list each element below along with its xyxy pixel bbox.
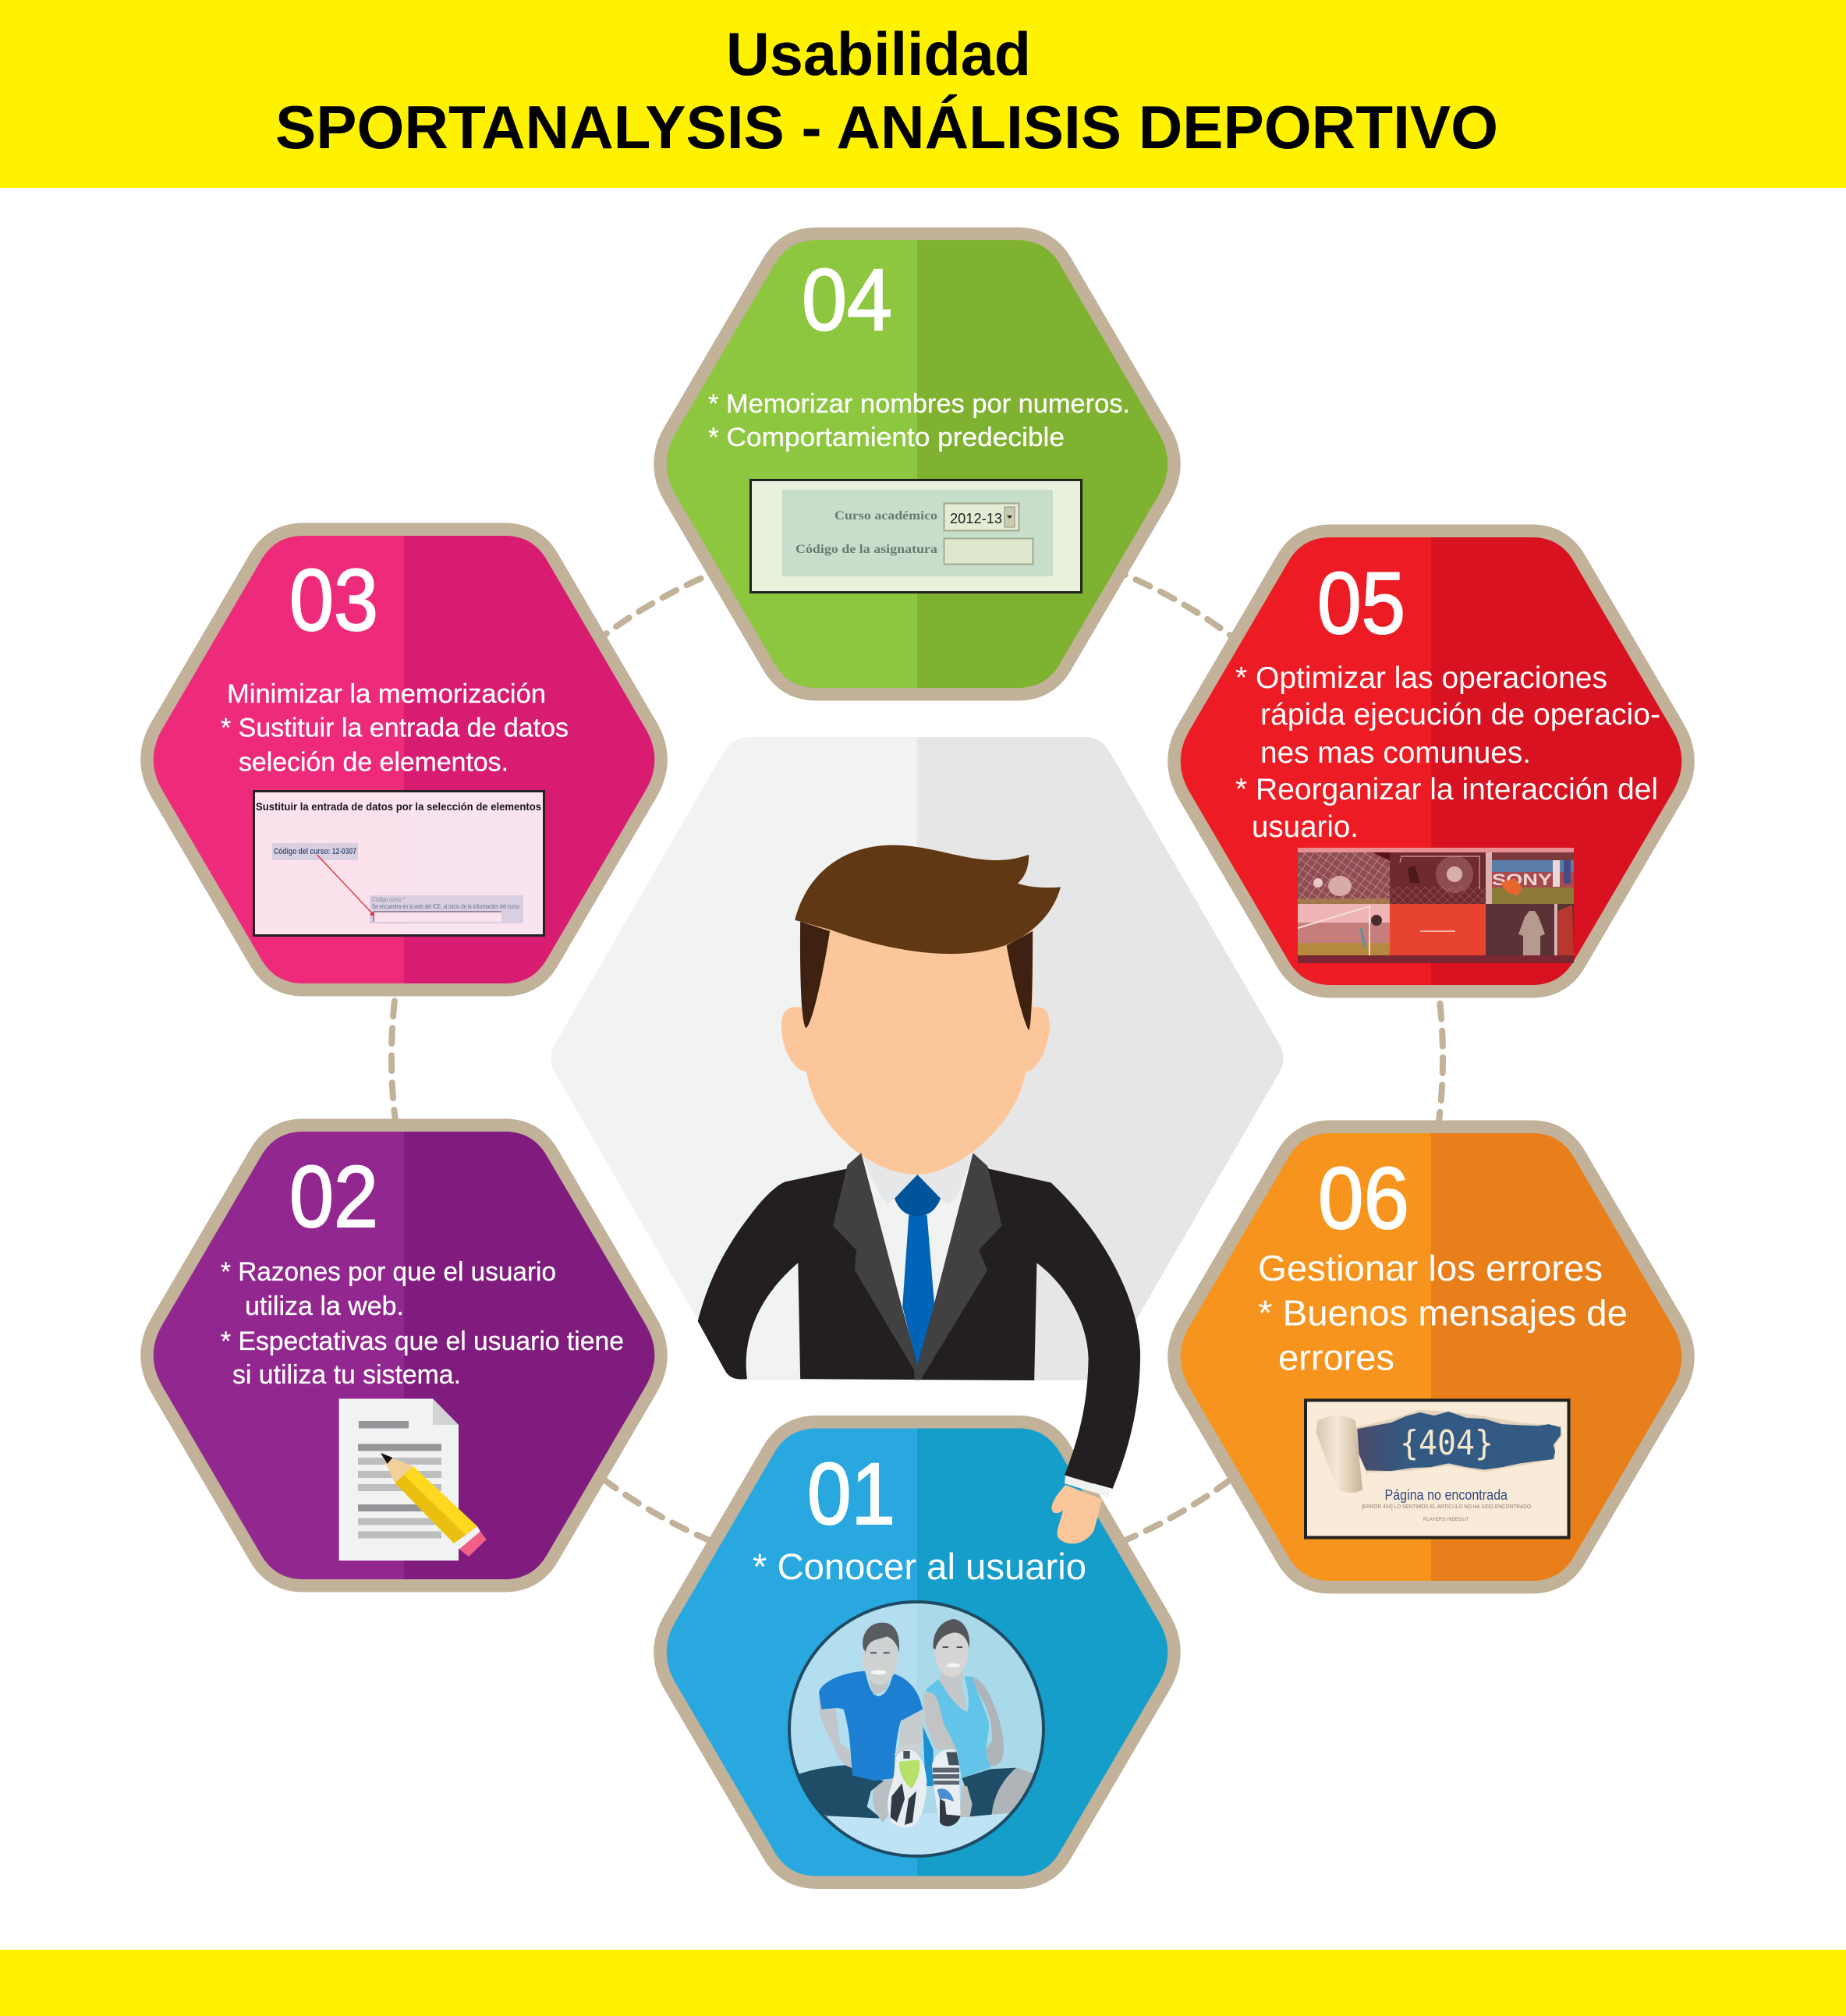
man knee (873, 1779, 895, 1823)
man: hand (1052, 1485, 1102, 1543)
text 02: * Razones por que el usuario (221, 1257, 556, 1287)
left shoe (888, 1749, 927, 1827)
man face (863, 1636, 898, 1685)
man extended arm (899, 1710, 923, 1752)
screenshot: course form: Curso académico (834, 509, 937, 523)
man left arm (819, 1696, 852, 1768)
hexagon shape 03 (154, 536, 654, 983)
hexagon shape 04 (667, 240, 1167, 688)
goal net photo 4 (1298, 904, 1390, 955)
text 03: * Sustituir la entrada de datos (221, 713, 569, 742)
text 05: * Optimizar las operaciones (1235, 661, 1607, 695)
screenshot: data entry substitution: Sustituir la entrada de datos por la selección de elementos (256, 800, 541, 813)
photo collage: football goals (1298, 848, 1574, 963)
text 04: * Memorizar nombres por numeros. (708, 389, 1130, 419)
hexagon shape 01 (667, 1429, 1167, 1876)
number 05: 05 (1317, 554, 1405, 652)
text 05: nes mas comunues. (1260, 736, 1531, 770)
number 03: 03 (289, 551, 378, 649)
goal net photo 1 (1298, 852, 1390, 904)
text 02: * Espectativas que el usuario tiene (221, 1327, 624, 1356)
text 02 (221, 1257, 624, 1390)
screenshot: course form: 2012-13 (950, 511, 1002, 526)
title line 1: Usabilidad (726, 19, 1031, 88)
text 03 (221, 679, 569, 777)
screenshot: data entry substitution (254, 791, 544, 936)
woman hair (934, 1619, 969, 1649)
footer banner (0, 1950, 1846, 2016)
panel 06: orange hexagon (1181, 1133, 1681, 1581)
text 05 (1235, 661, 1660, 844)
screenshot: 404 page: PLAYERS HIDEOUT (1423, 1517, 1469, 1522)
text 02: utiliza la web. (245, 1291, 404, 1321)
text 02: si utiliza tu sistema. (232, 1360, 461, 1390)
screenshot: 404 page: [ERROR 404] LO SENTIMOS EL ARTICULO NO HA SIDO ENCONTRADO (1362, 1503, 1531, 1510)
hexagon shape 06 (1181, 1133, 1681, 1581)
goalkeeper photo 2 (1390, 852, 1486, 904)
text 06: Gestionar los errores (1258, 1248, 1603, 1288)
man t-shirt (819, 1671, 923, 1780)
text 05: * Reorganizar la interacción del (1235, 773, 1658, 806)
man: jacket (698, 1153, 1140, 1489)
text 03: seleción de elementos. (239, 747, 508, 777)
icon: pencil (381, 1453, 487, 1557)
man neck (869, 1678, 889, 1695)
number 04: 04 (802, 251, 892, 349)
text 06: errores (1278, 1337, 1394, 1377)
photo: stretching couple in circle (788, 1599, 1050, 1864)
number 02: 02 (289, 1148, 378, 1245)
woman tank top (926, 1676, 990, 1778)
goalkeeper photo 6 (1486, 904, 1574, 955)
hexagon shape 02 (154, 1132, 654, 1579)
red title tile (1390, 904, 1486, 955)
central man figure (698, 845, 1140, 1543)
Sony stadium photo 3: SONY (1492, 871, 1552, 889)
torn paper reveal (1316, 1410, 1562, 1493)
man: collar and shirt (861, 1153, 973, 1366)
panel 02: purple hexagon (154, 1132, 654, 1579)
man: tie (895, 1175, 941, 1366)
man: lapels (833, 1153, 1002, 1380)
woman smile (943, 1646, 962, 1667)
right shoe (932, 1749, 961, 1826)
screenshot: 404 page: {404} (1400, 1423, 1493, 1463)
man shorts (798, 1765, 884, 1819)
text 04 (708, 389, 1130, 452)
number 01: 01 (807, 1445, 895, 1543)
text 05: usuario. (1252, 810, 1359, 844)
woman right arm (969, 1677, 1004, 1766)
panel 04: green hexagon (667, 240, 1167, 688)
screenshot: data entry substitution: Se encuentra en la web del ICE, al inicio de la información del curso (372, 903, 519, 910)
hexagon shape 05 (1181, 537, 1681, 985)
man: hair (795, 845, 1061, 954)
screenshot: data entry substitution: Código curso * (372, 896, 405, 903)
text 04: * Comportamiento predecible (708, 423, 1065, 452)
Sony stadium photo 3 (1486, 852, 1574, 904)
woman neck (940, 1667, 967, 1710)
text 01: * Conocer al usuario (753, 1546, 1086, 1587)
woman face (934, 1624, 969, 1677)
screenshot: course form (750, 480, 1081, 593)
screenshot: 404 page: Página no encontrada (1385, 1487, 1508, 1503)
screenshot: 404 page (1306, 1401, 1569, 1538)
title line 2: SPORTANALYSIS - ANÁLISIS DEPORTIVO (275, 93, 1498, 161)
man: side hair (800, 922, 1033, 1030)
woman shorts (962, 1768, 1016, 1816)
text 06: * Buenos mensajes de (1258, 1293, 1628, 1334)
woman left arm (923, 1692, 957, 1749)
screenshot: course form: Código de la asignatura (795, 543, 937, 556)
man: face (801, 924, 1033, 1175)
central background hexagon (551, 737, 1284, 1380)
panel 01: blue hexagon (667, 1429, 1167, 1876)
man hand (894, 1747, 920, 1755)
text 05: rápida ejecución de operacio- (1260, 698, 1660, 732)
man hair (863, 1623, 899, 1652)
panel 03: pink hexagon (154, 536, 654, 983)
man: ears (781, 1007, 1050, 1072)
woman back (923, 1726, 934, 1786)
dashed connector ring (392, 532, 1443, 1583)
woman calf (959, 1786, 973, 1817)
woman thigh (992, 1768, 1033, 1815)
number 06: 06 (1318, 1150, 1409, 1247)
text 06 (1258, 1248, 1628, 1377)
icon: document with pencil (339, 1399, 487, 1561)
man: shirt cuff (1065, 1476, 1110, 1497)
text 03: Minimizar la memorización (227, 679, 546, 709)
header banner (0, 0, 1846, 188)
man smile (870, 1652, 890, 1674)
screenshot: data entry substitution: Código del curso: 12-0307 (274, 847, 356, 856)
panel 05: red hexagon (1181, 537, 1681, 985)
